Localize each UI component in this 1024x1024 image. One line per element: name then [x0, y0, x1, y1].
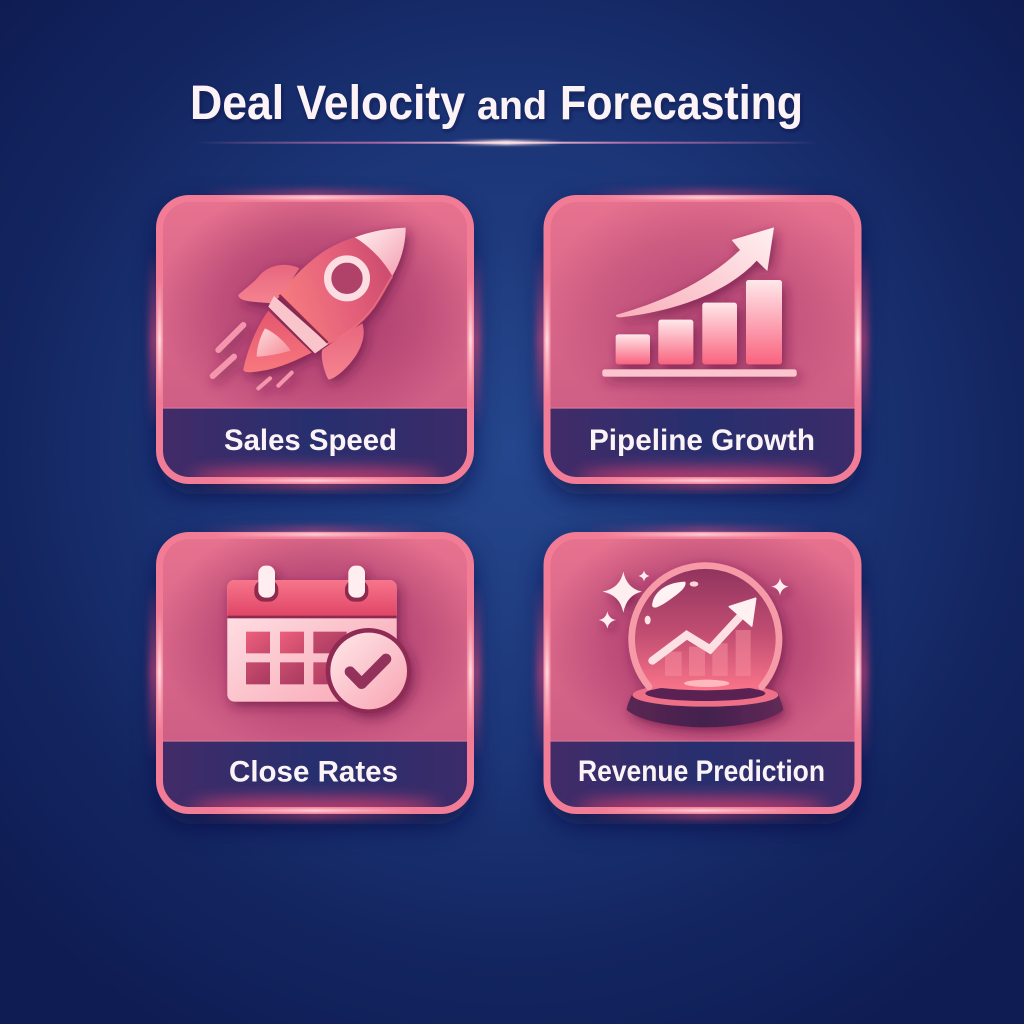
- title: Forecasting: [560, 77, 803, 130]
- icon: calendar with check: [227, 566, 411, 713]
- panel: sales speed: [150, 182, 486, 494]
- label: pipeline growth: Pipeline Growth: [589, 424, 815, 457]
- panel: pipeline growth: [538, 182, 874, 494]
- icon: crystal ball forecast: [599, 566, 789, 727]
- label: sales speed: Sales Speed: [224, 424, 397, 457]
- icon: rising bar chart: [602, 227, 797, 377]
- label: close rates: Close Rates: [229, 756, 398, 788]
- title: and: [477, 84, 547, 128]
- panel: revenue prediction: [538, 517, 874, 824]
- panel: close rates: [150, 517, 486, 824]
- icon: rocket: [213, 228, 406, 388]
- label: revenue prediction: Revenue Prediction: [578, 755, 825, 788]
- title: Deal Velocity: [190, 77, 465, 130]
- title: [190, 77, 803, 130]
- title underline: [195, 140, 820, 145]
